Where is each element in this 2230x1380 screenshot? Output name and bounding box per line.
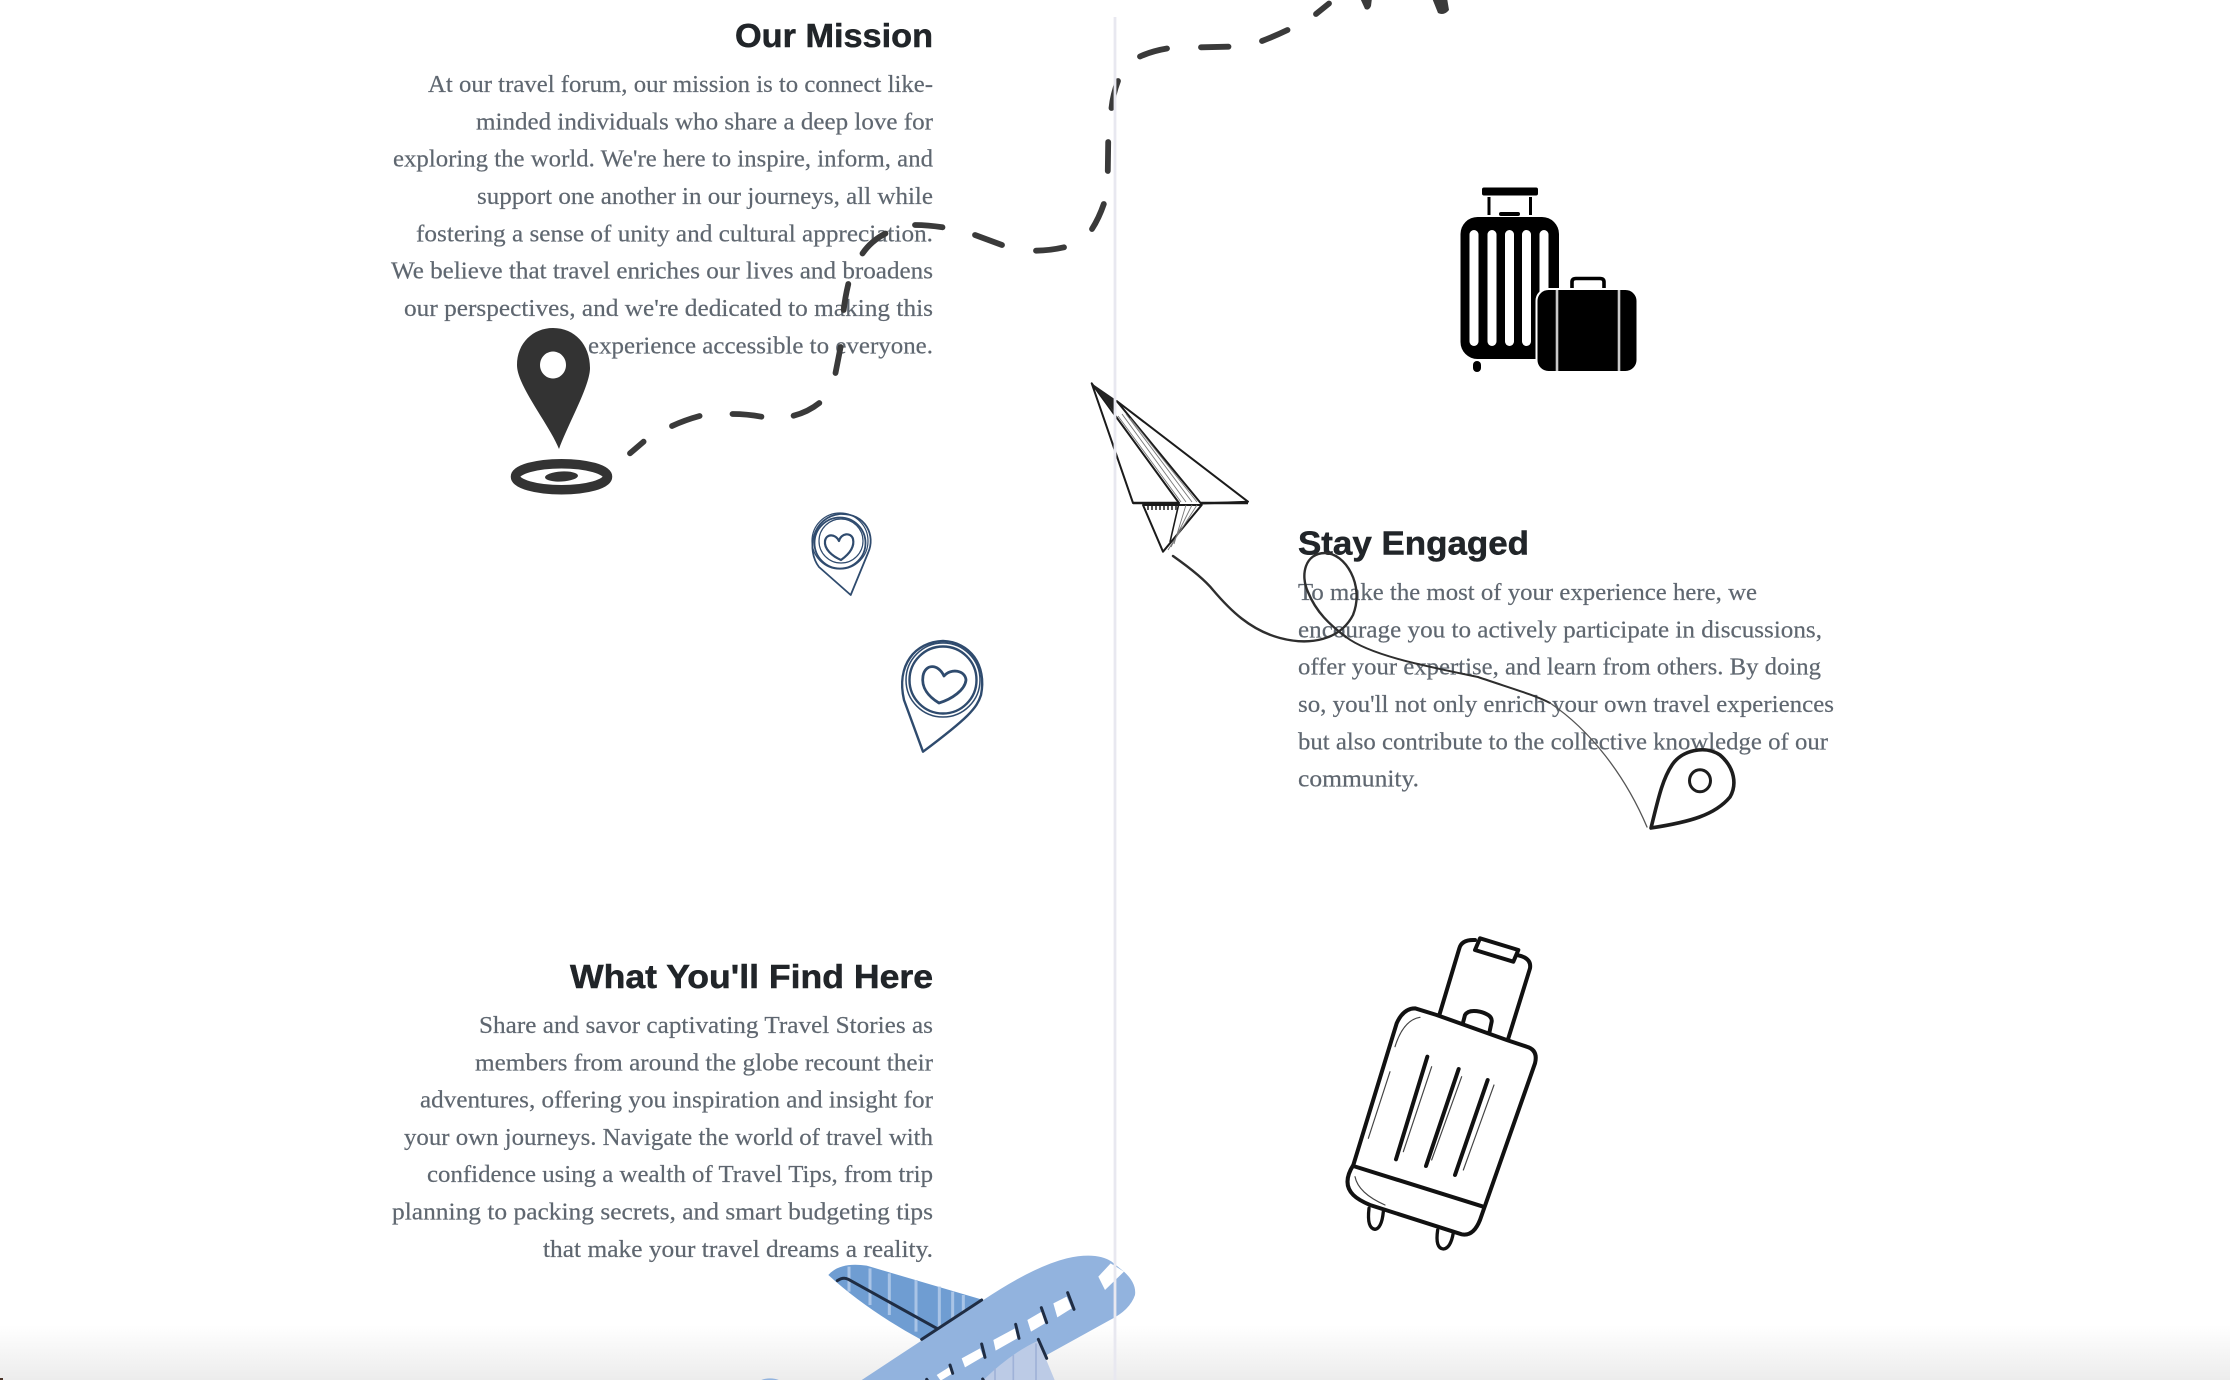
text block: mission body: experience accessible to everyone. — [588, 332, 933, 360]
text block: stay engaged body: so, you'll not only enrich your own travel experiences — [1298, 691, 1834, 718]
heading: what you'll find here: What You'll Find Here — [570, 958, 933, 995]
text block: stay engaged body — [1298, 579, 1834, 793]
text block: find here body: your own journeys. Navigate the world of travel with — [404, 1124, 933, 1151]
icon: outline location pin — [1651, 750, 1734, 828]
panel: stay engaged — [1298, 524, 1834, 793]
text block: stay engaged body: community. — [1298, 766, 1419, 793]
text block: mission body: support one another in our journeys, all while — [477, 183, 933, 210]
text block: mission body: fostering a sense of unity and cultural appreciation. — [416, 220, 933, 248]
icon: map pin with target — [516, 328, 608, 490]
icon: small heart pin — [812, 513, 871, 595]
panel: our mission — [391, 17, 933, 360]
icon: black luggage set — [1460, 188, 1638, 372]
text block: find here body: that make your travel dreams a reality. — [543, 1236, 933, 1263]
text block: mission body: We believe that travel enriches our lives and broadens — [391, 258, 933, 285]
text block: stay engaged body: offer your expertise, and learn from others. By doing — [1298, 654, 1821, 681]
text block: mission body: minded individuals who share a deep love for — [476, 108, 933, 136]
text block: find here body: adventures, offering you inspiration and insight for — [420, 1087, 933, 1114]
icon: outline rolling suitcase — [1347, 938, 1536, 1249]
text block: stay engaged body: To make the most of your experience here, we — [1298, 579, 1757, 606]
panel: what you'll find here — [392, 958, 933, 1263]
icon: large heart pin — [902, 641, 982, 752]
dashed flight route — [630, 0, 1449, 453]
icon: blue airplane — [757, 1256, 1135, 1380]
arrow: plane looping trail — [1173, 553, 1647, 827]
text block: find here body: members from around the globe recount their — [475, 1049, 933, 1076]
text block: mission body: our perspectives, and we're dedicated to making this — [404, 295, 933, 322]
icon: paper plane — [1092, 383, 1248, 552]
text block: mission body: exploring the world. We're here to inspire, inform, and — [393, 146, 933, 173]
text block: find here body: confidence using a wealth of Travel Tips, from trip — [427, 1161, 933, 1188]
text block: find here body — [392, 1012, 933, 1263]
heading: our mission: Our Mission — [735, 17, 933, 54]
text block: stay engaged body: but also contribute to the collective knowledge of our — [1298, 728, 1828, 755]
text block: find here body: Share and savor captivating Travel Stories as — [479, 1012, 933, 1039]
text block: mission body — [391, 71, 933, 360]
text block: stay engaged body: encourage you to actively participate in discussions, — [1298, 616, 1822, 643]
text block: find here body: planning to packing secrets, and smart budgeting tips — [392, 1198, 933, 1226]
heading: stay engaged: Stay Engaged — [1298, 524, 1529, 562]
text block: mission body: At our travel forum, our mission is to connect like- — [428, 71, 933, 98]
